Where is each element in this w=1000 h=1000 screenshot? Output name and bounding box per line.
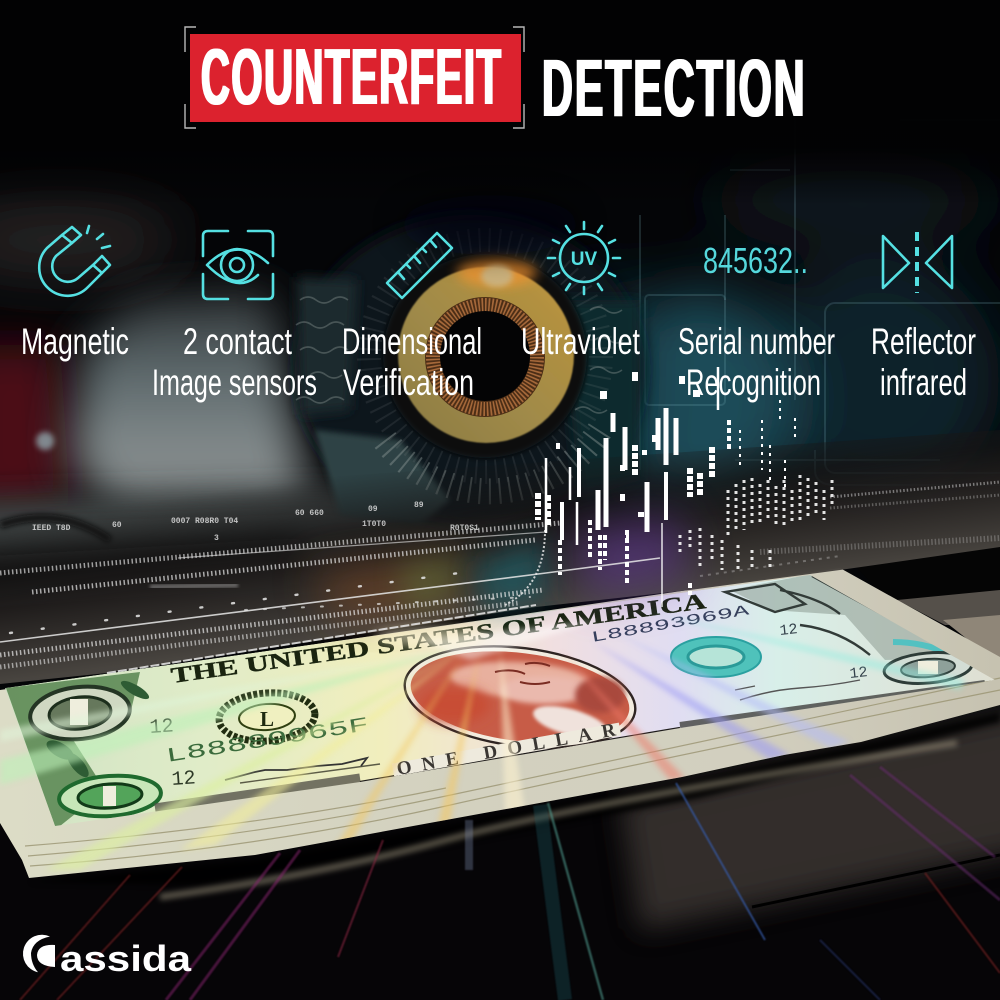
micro data text: 60 660	[295, 509, 324, 518]
banknote face: 12	[849, 664, 868, 683]
circuit plates	[295, 215, 645, 525]
rainbow light rays	[0, 610, 965, 870]
portrait oval	[404, 645, 636, 749]
feature: magnetic	[21, 226, 129, 362]
micro data text: 89	[414, 501, 424, 510]
top dark fade	[0, 0, 1000, 205]
feature: dimensional verification: Verification	[343, 362, 474, 403]
logo: cassida: assida	[60, 938, 192, 979]
feature: reflector infrared	[871, 232, 976, 403]
detection word: DETECTION	[542, 42, 805, 134]
shadow under stack	[29, 712, 1000, 885]
corner ornament top right	[725, 574, 965, 660]
corner numeral bottom left	[58, 772, 162, 820]
feature: serial number recognition: Recognition	[686, 362, 821, 403]
micro data text: 09	[368, 505, 378, 514]
eyelid red tissue	[0, 345, 70, 515]
serial numbers left: 12	[171, 767, 196, 792]
feature: contact image sensors: Image sensors	[152, 362, 317, 403]
badge brackets	[185, 27, 524, 128]
icon: mirror triangles	[883, 232, 952, 293]
hologram data bars	[538, 367, 795, 607]
eye white skin	[70, 290, 312, 525]
radial traces	[296, 240, 623, 491]
feature: dimensional verification: Dimensional	[342, 321, 482, 362]
banknote face: 12	[779, 621, 798, 640]
icon: ruler	[387, 233, 452, 298]
colour glow on scan line	[310, 515, 690, 646]
banknote stack edge	[0, 568, 1000, 878]
eye iris	[295, 195, 645, 525]
micro data text: 1T0T0	[362, 520, 386, 529]
feature: ultraviolet	[521, 222, 641, 362]
left border green engraving	[6, 672, 140, 826]
corner numeral bottom right	[883, 649, 973, 687]
feature: serial number recognition	[678, 240, 835, 403]
light reflection streak	[160, 743, 957, 897]
floor surface	[0, 530, 1000, 1000]
micro data text	[32, 501, 479, 543]
icon: magnet	[39, 226, 110, 296]
data stream lines	[0, 482, 1000, 673]
feature: dimensional verification	[342, 233, 482, 403]
hologram dot squares	[556, 372, 700, 538]
one dollar band: ONE DOLLAR	[395, 720, 618, 780]
seal left: L	[260, 707, 274, 731]
serial numbers left	[150, 717, 366, 785]
icon: UV sun	[548, 222, 620, 294]
lower lid shading	[0, 490, 540, 600]
hologram dot matrix	[680, 475, 832, 570]
micro data text: 3	[214, 534, 219, 543]
bottom border	[155, 684, 985, 808]
heading text on note: THE UNITED STATES OF AMERICA	[169, 588, 708, 688]
tan surface behind note	[840, 530, 1000, 610]
feature: contact image sensors	[152, 231, 317, 403]
floor light rays	[20, 767, 1000, 1000]
micro data text: IEED T8D	[32, 524, 71, 533]
scanner hood	[0, 430, 1000, 684]
seal right teal	[671, 637, 761, 677]
icon: logo crescent	[23, 935, 55, 972]
micro data text: 60	[112, 521, 122, 530]
signature left	[225, 758, 367, 780]
feature: serial number recognition: Serial number	[678, 321, 835, 362]
serial numbers left: L88889965F	[164, 714, 371, 769]
corner numeral top left	[28, 682, 132, 744]
icon: eye scanner	[203, 231, 273, 299]
feature: ultraviolet: UV	[571, 249, 598, 270]
banknote face	[5, 574, 995, 826]
title	[185, 27, 805, 134]
seal left	[217, 690, 317, 744]
panel: circuit tech outlines	[640, 100, 1000, 485]
logo: cassida	[23, 935, 192, 979]
right floor panel	[620, 705, 1000, 930]
icon: serial digits: 845632..	[703, 240, 808, 281]
feature: magnetic: Magnetic	[21, 321, 129, 362]
micro data text: 0007 R08R0 T04	[171, 517, 238, 526]
counterfeit badge: COUNTERFEIT	[201, 33, 501, 122]
micro data text: R0T0S1	[450, 524, 479, 533]
serial numbers left: 12	[149, 715, 174, 740]
feature: contact image sensors: 2 contact	[183, 321, 293, 362]
serial right: L88893969A	[590, 602, 750, 647]
signature right	[735, 680, 860, 700]
leaf ornament	[44, 678, 151, 780]
feature: ultraviolet: Ultraviolet	[521, 321, 641, 362]
